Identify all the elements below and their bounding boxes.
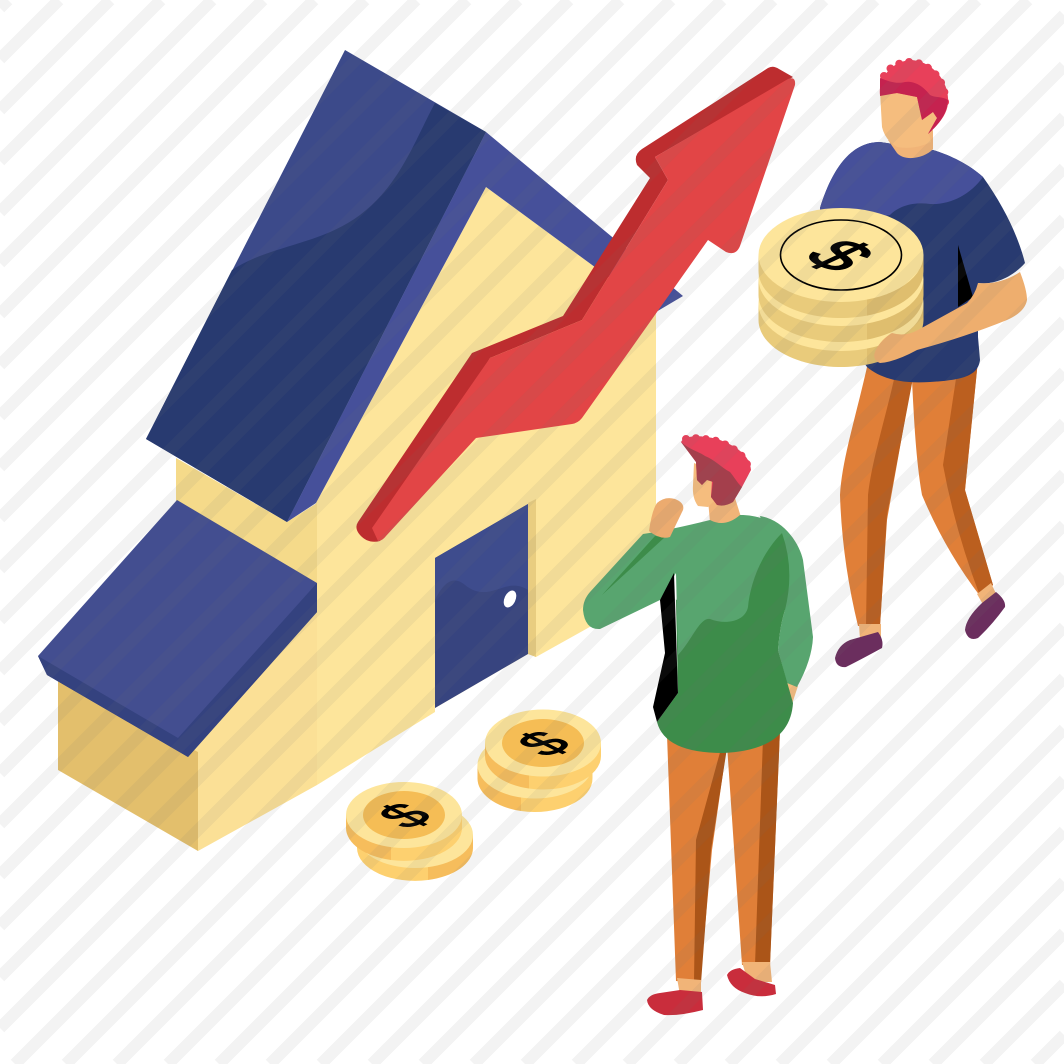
man 2: right arm (760, 516, 813, 687)
house: wing side wall (58, 680, 198, 851)
man 2: shadow side (653, 573, 678, 722)
man 2: trousers (667, 730, 780, 983)
man 1: neck (888, 130, 933, 158)
house: main front wall (316, 187, 656, 785)
coins: left ground stack (346, 782, 473, 881)
man 2: face (693, 463, 715, 507)
house: door (435, 504, 528, 708)
man 2: hand (649, 498, 683, 538)
house: door frame (528, 499, 536, 657)
house: main roof panel (146, 50, 486, 522)
man 1: hair (880, 60, 948, 134)
coin stack held by man 1: $ (787, 231, 893, 280)
coins: right ground stack: $ (504, 724, 585, 763)
person: man carrying coins (758, 60, 1027, 667)
coins: right ground stack (477, 710, 601, 812)
coin stack held by man 1 (758, 208, 924, 367)
man 2: ankles (677, 962, 772, 995)
man 2: sweater upper and left arm (583, 515, 782, 655)
arrow: rising red trend (356, 67, 795, 542)
man 1: ankles (859, 583, 999, 640)
person: man looking at the house (583, 436, 813, 1015)
house: wing front wall (188, 610, 317, 851)
house: wing roof (38, 500, 317, 757)
man 2: neck (708, 498, 741, 524)
house: side wall under main roof (176, 458, 317, 584)
man 1: trousers (840, 360, 993, 626)
man 1: ear and face (880, 90, 937, 148)
man 1: arm and hand (874, 272, 1027, 363)
house (38, 50, 683, 851)
man 1: t-shirt (820, 142, 1025, 382)
man 2: sleeve crease (602, 536, 665, 595)
man 2: shoes (647, 968, 776, 1015)
man 2: wrist (787, 682, 798, 704)
man 1: shoes (835, 592, 1005, 667)
man 2: hair (681, 436, 751, 506)
coins: left ground stack: $ (365, 796, 446, 835)
man 2: sweater body (657, 533, 793, 753)
house: main roof edge (287, 132, 683, 522)
